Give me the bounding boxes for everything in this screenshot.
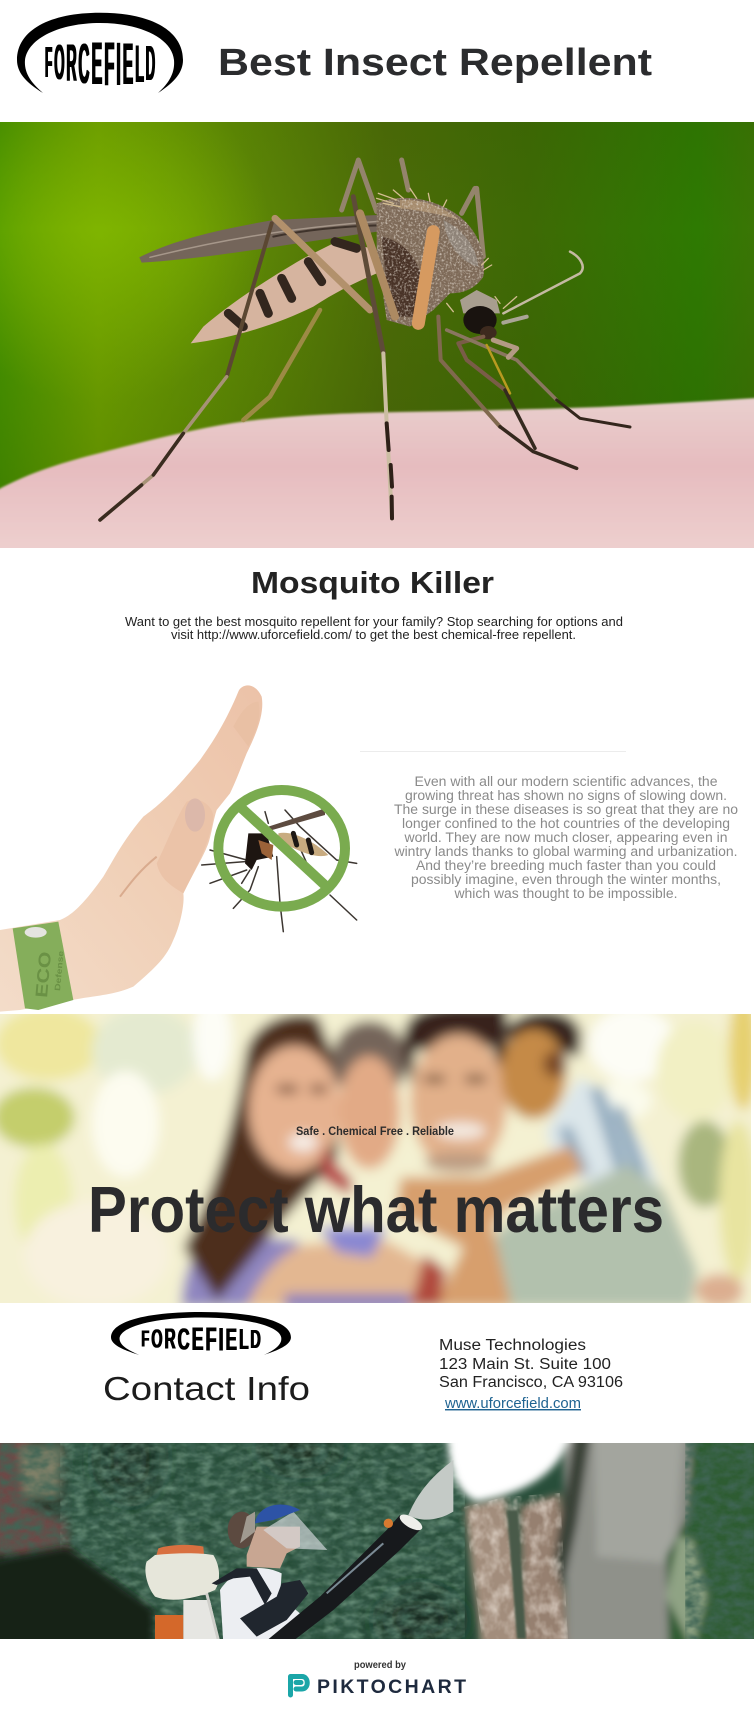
credit: powered by: powered by: [354, 1659, 406, 1671]
banner headline: Protect what matters: [88, 1173, 664, 1246]
girl's red top: [321, 1147, 352, 1196]
photo: hand with wristband and no-mosquito sign: [0, 685, 357, 1012]
bent leg: [458, 337, 505, 390]
website link: www.uforcefield.com: [444, 1396, 581, 1412]
wing: [140, 215, 377, 263]
thorax scale texture: [376, 198, 484, 326]
mist wall: [563, 1430, 693, 1650]
hand: [0, 685, 262, 1012]
logo wordmark: L: [135, 36, 144, 94]
tank cap: [156, 1545, 204, 1557]
leg two: [353, 197, 383, 353]
logo arc: [17, 13, 183, 93]
intro text: visit http://www.uforcefield.com/ to get the best chemical-free repellent.: [171, 627, 576, 642]
footer logo wordmark: L: [239, 1323, 249, 1355]
tagline: Safe . Chemical Free . Reliable: [296, 1126, 454, 1138]
body paragraph: Even with all our modern scientific advances, the: [414, 774, 718, 789]
boy's hair: [507, 1011, 582, 1057]
face shield: [263, 1512, 327, 1550]
bark crack: [553, 1433, 591, 1590]
mosquito legs: [202, 810, 357, 932]
photo: mosquito on skin: [0, 122, 754, 570]
footer logo arc: [111, 1312, 291, 1355]
logo wordmark: R: [66, 35, 77, 93]
boy's striped shirt: [544, 1078, 658, 1184]
no-mosquito sign: [202, 790, 357, 932]
logo wordmark: F: [45, 37, 52, 87]
body paragraph: growing threat has shown no signs of slowing down.: [405, 788, 727, 803]
right hedge texture: [685, 1443, 754, 1639]
purple centre: [319, 1227, 386, 1257]
girl's face: [338, 1056, 400, 1169]
front leg: [438, 317, 500, 427]
boy's arm and embracing arms: [396, 1146, 584, 1307]
foliage shadow masses: [100, 1420, 460, 1650]
piktochart icon: [290, 1676, 307, 1695]
neck and head: [460, 290, 500, 313]
far hind leg: [243, 310, 320, 420]
footer logo wordmark: C: [178, 1324, 190, 1357]
orange clamp: [384, 1519, 393, 1528]
gap between trunks: [507, 1510, 526, 1639]
thorax: [377, 198, 484, 327]
prohibition slash: [240, 807, 328, 888]
footer logo wordmark: E: [192, 1323, 203, 1358]
headband: [240, 1512, 255, 1543]
logo wordmark: D: [146, 36, 155, 91]
divider line: [360, 751, 626, 752]
heading: Mosquito Killer: Mosquito Killer: [251, 565, 494, 600]
wristband: [13, 922, 73, 1010]
contact address: Muse Technologies: [439, 1337, 586, 1354]
contact address: [439, 1337, 623, 1391]
boy's face: [501, 1029, 566, 1119]
body paragraph: wintry lands thanks to global warming and urbanization.: [393, 844, 738, 859]
blower tube: [263, 1515, 422, 1643]
intro text: Want to get the best mosquito repellent for your family? Stop searching for options and: [125, 614, 623, 629]
thorax hairs: [377, 188, 517, 312]
backpack frame: [183, 1600, 220, 1643]
logo: Piktochart: [290, 1676, 466, 1698]
woman's face: [249, 1046, 340, 1172]
logo wordmark: E: [123, 33, 133, 98]
contact address: 123 Main St. Suite 100: [439, 1356, 611, 1373]
hands: [246, 1241, 434, 1307]
wristband brand: Defense: [53, 950, 66, 991]
antennae: [503, 252, 583, 313]
face and neck: [247, 1527, 300, 1568]
woman's shirt: [181, 1234, 299, 1307]
body paragraph: which was thought to be impossible.: [453, 886, 678, 901]
rear upright legs: [342, 160, 483, 257]
body paragraph: [393, 774, 738, 901]
contact heading: Contact Info: [103, 1370, 310, 1407]
logo wordmark: F: [104, 29, 114, 99]
green background: [0, 122, 754, 490]
mosquito abdomen: [278, 833, 328, 856]
intro text: [125, 614, 623, 642]
mosquito: [100, 160, 630, 520]
girl's hair: [332, 1021, 407, 1101]
footer logo wordmark: R: [165, 1322, 176, 1355]
contact address: San Francisco, CA 93106: [439, 1374, 623, 1391]
hair: [228, 1512, 256, 1548]
proboscis: [487, 345, 510, 393]
logo wordmark: E: [92, 31, 102, 98]
shirt: [220, 1568, 300, 1643]
logo wordmark: O: [54, 35, 65, 90]
right hedge: [666, 1430, 754, 1650]
body paragraph: world. They are now much closer, appearing even in: [403, 830, 728, 845]
palps: [493, 340, 517, 357]
spray cloud: [447, 1430, 572, 1502]
man's hair: [403, 1004, 509, 1101]
photo: technician spraying trees: [0, 1420, 754, 1650]
visor: [255, 1505, 300, 1523]
man's face: [410, 1034, 507, 1171]
footer logo wordmark: F: [206, 1321, 217, 1358]
body paragraph: And they’re breeding much faster than you could: [416, 858, 716, 873]
footer logo wordmark: E: [226, 1323, 237, 1358]
mosquito wing: [268, 808, 325, 831]
piktochart wordmark: PIKTOCHART: [317, 1676, 466, 1698]
glove and sleeve: [240, 1580, 308, 1637]
body paragraph: longer confined to the hot countries of the developing: [402, 816, 730, 831]
foliage texture: [0, 1443, 465, 1639]
logo wordmark: I: [116, 32, 121, 99]
nozzle: [397, 1511, 425, 1533]
shoulder strap: [212, 1568, 272, 1605]
abdomen: [191, 240, 377, 343]
wristband brand: ECO: [32, 951, 55, 998]
prohibition ring: [218, 790, 345, 907]
footer logo wordmark: D: [250, 1326, 261, 1354]
backpack engine: [155, 1615, 183, 1642]
man's shirt: [490, 1163, 702, 1303]
spray cone: [408, 1460, 453, 1520]
body paragraph: The surge in these diseases is so great that they are no: [394, 802, 738, 817]
photo: blurred family banner: [0, 1014, 751, 1303]
far front leg: [447, 330, 557, 400]
logo wordmark: C: [78, 31, 90, 95]
footer logo wordmark: O: [151, 1325, 163, 1354]
dark hedge base: [0, 1547, 154, 1650]
red garment: [410, 1254, 446, 1307]
femur two: [360, 213, 395, 317]
bark texture: [460, 1490, 572, 1639]
logo: Forcefield header: [17, 13, 183, 99]
title: Best Insect Repellent: [218, 42, 652, 84]
footer logo wordmark: I: [219, 1321, 224, 1358]
mosquito body: [245, 833, 273, 870]
backpack tank: [145, 1553, 219, 1600]
footer logo wordmark: F: [141, 1327, 149, 1353]
leg one: [275, 218, 370, 310]
wristband brand: [32, 950, 66, 998]
left shrubs: [0, 1430, 67, 1650]
body paragraph: possibly imagine, even through the winter months,: [411, 872, 721, 887]
blurred background foliage: [0, 1014, 751, 1303]
logo: Forcefield footer: [111, 1312, 291, 1358]
tree trunks: [464, 1497, 524, 1650]
woman's hair: [183, 1014, 338, 1301]
orange femur: [418, 232, 433, 323]
skin surface: [0, 396, 754, 548]
